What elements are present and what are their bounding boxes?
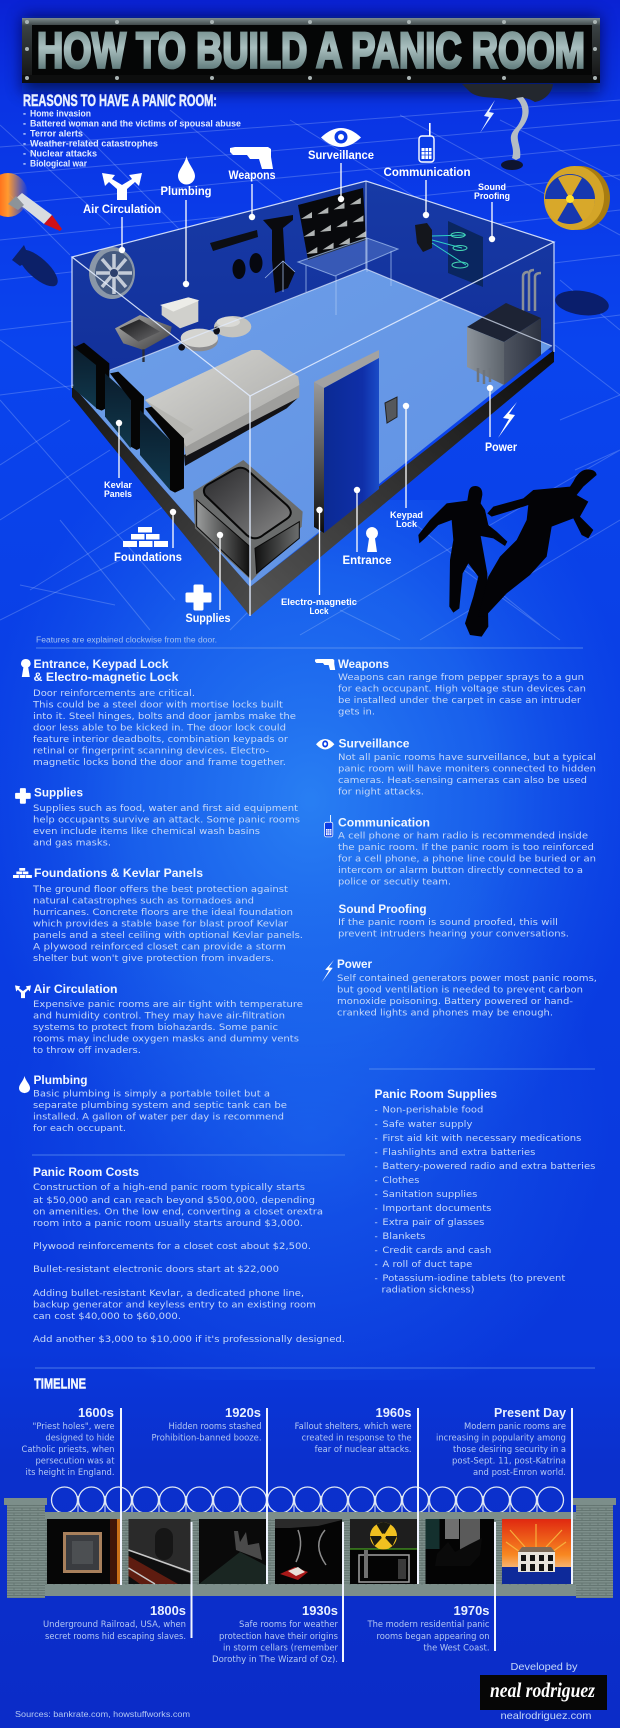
panel: supplies list: - — [374, 1176, 378, 1186]
bed and kevlar panels — [73, 343, 303, 581]
panel: supplies list: Panic Room Supplies — [374, 1089, 497, 1101]
panel: supplies list: - — [374, 1260, 378, 1270]
section: power — [322, 959, 597, 1018]
room illustration — [72, 181, 554, 616]
section: entrance: retinal or fingerprint scanning devices. Electro- — [33, 746, 269, 756]
section: plumbing — [19, 1075, 288, 1134]
label: entrance: Entrance — [342, 555, 392, 567]
section: foundations — [13, 868, 303, 964]
section: power: Power — [337, 959, 373, 971]
reasons list: - — [23, 148, 26, 158]
section: air circulation: systems to protect from biohazards. Some panic — [33, 1023, 278, 1033]
section: power: cranked lights and phones may be enough. — [337, 1008, 553, 1018]
grenades — [232, 253, 262, 279]
section: surveillance: cameras. Heat-sensing cameras can also be used — [338, 776, 587, 786]
section: communication: for a cell phone, a phone line could be buried or an — [338, 854, 596, 864]
label: electro-magnetic lock: Lock — [310, 606, 329, 617]
section: weapons: Weapons — [338, 659, 389, 671]
section: costs: can cost $40,000 to $60,000. — [33, 1312, 181, 1322]
section: power: Self contained generators power most panic rooms, — [337, 974, 597, 984]
panel: supplies list: - — [374, 1120, 378, 1130]
section: supplies: help occupants survive an attack. Some panic rooms — [33, 816, 300, 826]
section: entrance: feature interior deadbolts, combination keypads or — [33, 735, 288, 745]
panel: supplies list: Flashlights and extra batteries — [382, 1148, 536, 1158]
section: communication: the panic room. If the panic room is too reinforced — [338, 843, 594, 853]
section: entrance — [21, 659, 297, 768]
timeline: 1800s: Underground Railroad, USA, when — [43, 1620, 186, 1630]
timeline: 1600s: persecution was at — [36, 1456, 115, 1466]
timeline: present day: and post-Enron world. — [473, 1468, 566, 1478]
panel: supplies list: - — [374, 1232, 378, 1242]
glass wireframe — [72, 181, 554, 616]
timeline: 1970s: the West Coast. — [424, 1644, 490, 1654]
credit: developer logo — [480, 1662, 607, 1722]
section: surveillance — [316, 738, 596, 798]
panel: supplies list: - — [374, 1218, 378, 1228]
label: power — [485, 385, 517, 454]
panel: supplies list: Extra pair of glasses — [382, 1218, 485, 1228]
section: costs: room into a panic room usually starts around $3,000. — [33, 1219, 303, 1229]
footnote: Features are explained clockwise from the door. — [36, 636, 217, 644]
section: entrance: into it. Steel hinges, bolts and door jambs make the — [33, 712, 297, 722]
icon: bomb — [12, 244, 63, 292]
silhouette: right figure — [478, 469, 597, 617]
label: surveillance: Surveillance — [308, 150, 374, 162]
section: air circulation: Expensive panic rooms are air tight with temperature — [33, 1000, 304, 1010]
label: electro-magnetic lock — [281, 507, 357, 617]
intercom — [415, 223, 432, 252]
timeline: 1920s: Hidden rooms stashed — [168, 1422, 262, 1432]
label: sound proofing: Proofing — [474, 191, 510, 202]
icon: tornado and lightning — [462, 84, 553, 170]
section: costs: Bullet-resistant electronic doors start at $22,000 — [33, 1265, 279, 1275]
icon: shadow — [554, 287, 610, 319]
timeline: 1930s: Dorothy in The Wizard of Oz). — [212, 1655, 338, 1665]
section: communication: A cell phone or ham radio is recommended inside — [338, 832, 589, 842]
panel: supplies list: - — [374, 1134, 378, 1144]
timeline: present day: increasing in popularity among — [436, 1434, 566, 1444]
panel: supplies list: Credit cards and cash — [382, 1246, 491, 1256]
section: supplies: Supplies such as food, water and first aid equipment — [33, 804, 299, 814]
section: weapons: be installed under the carpet in case an intruder — [338, 696, 581, 706]
section: supplies — [16, 788, 300, 848]
picture: present day house — [502, 1519, 571, 1584]
section: foundations: Foundations & Kevlar Panels — [34, 868, 203, 880]
silhouettes — [418, 469, 597, 637]
timeline heading: TIMELINE — [34, 1376, 86, 1392]
label: supplies — [186, 532, 230, 625]
room foundation slab — [72, 350, 554, 616]
timeline: 1600s — [22, 1405, 121, 1585]
air vent fan — [89, 247, 135, 299]
section: costs: at $50,000 and can reach beyond $500,000, depending — [33, 1196, 315, 1206]
panel: supplies list: radiation sickness) — [382, 1286, 474, 1296]
section: communication: Communication — [338, 818, 430, 830]
picture: 1960s fallout shelter — [350, 1519, 417, 1584]
section: entrance: door less able to be kicked in. The door lock could — [33, 724, 286, 734]
label: supplies: Supplies — [186, 613, 230, 625]
section: entrance: Door reinforcements are critical. — [33, 689, 195, 699]
label: weapons — [228, 147, 276, 220]
section: weapons: gets in. — [338, 708, 375, 718]
section: foundations: hurricanes. Concrete floors are the ideal foundation — [33, 908, 293, 918]
label: electro-magnetic lock: Electro-magnetic — [281, 597, 357, 608]
section: costs: Construction of a high-end panic room typically starts — [33, 1183, 305, 1193]
picture: 1920s hidden room — [199, 1519, 267, 1584]
reasons list: Biological war — [30, 158, 87, 168]
label: communication — [384, 123, 470, 218]
section: surveillance: for night attacks. — [338, 788, 424, 798]
label: kevlar panels — [104, 420, 132, 500]
reasons list: - — [23, 118, 26, 128]
label: air circulation — [83, 173, 161, 253]
section: costs: Panic Room Costs — [33, 1167, 139, 1179]
section: costs: Plywood reinforcements for a closet cost about $2,500. — [33, 1242, 311, 1252]
section: costs: backup generator and keyless entry to an existing room — [33, 1300, 316, 1310]
timeline: 1960s — [295, 1405, 418, 1584]
timeline: 1970s: rooms began appearing on — [376, 1632, 490, 1642]
section: power: but good ventilation is needed to prevent carbon — [337, 986, 583, 996]
timeline: present day: Modern panic rooms are — [464, 1422, 566, 1432]
icon: missile — [0, 173, 62, 231]
bidet — [213, 316, 251, 337]
timeline: 1960s: Fallout shelters, which were — [295, 1422, 412, 1432]
monitor wall — [298, 188, 366, 260]
label: kevlar panels: Kevlar — [104, 480, 132, 491]
section: weapons: Weapons can range from pepper sprays to a gun — [338, 673, 584, 683]
silhouette: left figure — [418, 486, 507, 637]
section: foundations: natural catastrophes such as tornadoes and — [33, 896, 254, 906]
section: surveillance: Not all panic rooms have surveillance, but a typical — [338, 753, 596, 763]
section: plumbing: separate plumbing system and septic tank can be — [33, 1101, 288, 1111]
icon: radiation drum — [540, 162, 610, 234]
section: entrance: magnetic locks bond the door and frame together. — [33, 758, 286, 768]
panel: supplies list: - — [374, 1246, 378, 1256]
panel: supplies list: Sanitation supplies — [382, 1190, 478, 1200]
reasons list: REASONS TO HAVE A PANIC ROOM: — [23, 92, 217, 110]
section: entrance: Entrance, Keypad Lock — [34, 659, 169, 671]
credit: developer logo: Developed by — [510, 1662, 578, 1673]
plumbing fixtures — [115, 297, 251, 362]
label: air circulation: Air Circulation — [83, 204, 161, 216]
kevlar panel 1 — [73, 343, 109, 411]
timeline: 1960s: created in response to the — [302, 1434, 412, 1444]
sources: Sources: bankrate.com, howstuffworks.com — [15, 1709, 190, 1719]
timeline: 1970s: 1970s — [454, 1603, 490, 1618]
section: costs: Add another $3,000 to $10,000 if it's professionally designed. — [33, 1335, 345, 1345]
section: foundations: which provides a stable base for blast proof Kevlar — [33, 920, 288, 930]
timeline: 1930s: protection have their origins — [219, 1632, 339, 1642]
label: keypad lock — [390, 403, 423, 530]
bed — [145, 350, 299, 466]
section: plumbing: installed. A gallon of water per day is recommend — [33, 1112, 284, 1122]
panel: supplies list: Potassium-iodine tablets (to prevent — [382, 1274, 566, 1284]
credit: developer logo: nealrodriguez.com — [500, 1710, 592, 1722]
section: sound proofing: Sound Proofing — [338, 904, 426, 916]
section: surveillance: Surveillance — [338, 738, 410, 750]
panel: supplies list: Non-perishable food — [382, 1106, 483, 1116]
timeline: 1600s: its height in England. — [26, 1468, 114, 1478]
timeline: 1960s: 1960s — [376, 1405, 412, 1420]
label: foundations — [114, 509, 182, 564]
label: communication: Communication — [384, 167, 470, 179]
panel: supplies list: - — [374, 1204, 378, 1214]
picture: 1930s storm cellar — [275, 1519, 342, 1584]
label: surveillance — [308, 128, 374, 202]
label: kevlar panels: Panels — [104, 489, 132, 500]
section: plumbing: for each occupant. — [33, 1124, 126, 1134]
timeline: 1800s: 1800s — [150, 1603, 186, 1618]
timeline: 1920s — [152, 1405, 267, 1584]
reasons list: Nuclear attacks — [30, 148, 97, 158]
desk — [298, 238, 398, 315]
panel: supplies list: - — [374, 1190, 378, 1200]
generator — [467, 270, 541, 385]
section: sound proofing — [338, 904, 569, 940]
timeline: present day: Present Day — [494, 1405, 567, 1420]
section: foundations: panels and a steel ceiling with optional Kevlar panels. — [33, 931, 303, 941]
label: power: Power — [485, 442, 517, 454]
section: sound proofing: If the panic room is sound proofed, this will — [338, 918, 558, 928]
rocket launcher — [210, 230, 258, 251]
timeline: 1800s: secret rooms hid escaping slaves. — [45, 1632, 186, 1642]
room walls — [72, 181, 554, 388]
section: supplies: and gas masks. — [33, 838, 111, 848]
timeline: 1930s: in storm cellars (remember — [223, 1644, 338, 1654]
section: entrance: & Electro-magnetic Lock — [34, 672, 179, 684]
toilet — [160, 297, 218, 351]
door — [314, 350, 379, 533]
section: entrance: This could be a steel door with mortise locks built — [32, 700, 284, 710]
label: sound proofing: Sound — [478, 182, 506, 193]
reasons list: - — [23, 158, 26, 168]
panel: supplies list: Clothes — [382, 1176, 420, 1186]
panel: supplies list: A roll of duct tape — [382, 1260, 473, 1270]
label: plumbing: Plumbing — [160, 186, 212, 198]
timeline: 1600s: Catholic priests, when — [22, 1445, 114, 1455]
reasons list — [23, 92, 241, 168]
sound proof panel — [432, 221, 483, 287]
panel: supplies list: - — [374, 1162, 378, 1172]
section: sound proofing: prevent intruders hearing your conversations. — [338, 930, 569, 940]
title banner — [22, 16, 600, 92]
panel: supplies list: First aid kit with necessary medications — [382, 1134, 582, 1144]
timeline: 1970s — [367, 1522, 495, 1654]
panel: supplies list: - — [374, 1274, 378, 1284]
label: weapons: Weapons — [228, 170, 276, 182]
reasons list: Battered woman and the victims of spousal abuse — [30, 118, 241, 128]
timeline: 1920s: 1920s — [225, 1405, 261, 1420]
label: keypad lock: Keypad — [390, 510, 423, 521]
panel: supplies list: Safe water supply — [382, 1120, 473, 1130]
section: costs: on amenities. On the low end, converting a closet orextra — [33, 1208, 323, 1218]
section: foundations: shelter but won't give protection from invaders. — [33, 954, 274, 964]
panel: supplies list — [374, 1089, 596, 1296]
reasons list: Home invasion — [30, 108, 91, 118]
timeline: present day: those desiring security in a — [453, 1445, 566, 1455]
section: weapons: for each occupant. High voltage stun devices can — [338, 684, 586, 694]
section: supplies: even include items like chemical wash basins — [33, 827, 260, 837]
reasons list: - — [23, 128, 26, 138]
kevlar panel 3 — [140, 407, 184, 493]
timeline: 1930s — [212, 1522, 343, 1665]
section: air circulation: rooms may include oxygen masks and dummy vents — [33, 1034, 299, 1044]
supply box — [193, 460, 303, 581]
section: costs: Adding bullet-resistant Kevlar, a dedicated phone line, — [33, 1289, 304, 1299]
panel: supplies list: Important documents — [382, 1204, 492, 1214]
panel: supplies list: Battery-powered radio and extra batteries — [382, 1162, 596, 1172]
label: plumbing — [160, 156, 212, 287]
section: power: monoxide poisoning. Battery powered or hand- — [337, 997, 573, 1007]
section: communication: police or secutiy team. — [338, 878, 451, 888]
panel: supplies list: - — [374, 1106, 378, 1116]
timeline: 1920s: Prohibition-banned booze. — [152, 1434, 262, 1444]
barbed wire — [52, 1487, 564, 1513]
timeline: 1970s: The modern residential panic — [367, 1620, 490, 1630]
label: sound proofing — [474, 182, 510, 242]
wall structure — [4, 1498, 616, 1598]
label: entrance — [342, 487, 392, 567]
reasons list: - — [23, 138, 26, 148]
timeline: 1930s: Safe rooms for weather — [239, 1620, 338, 1630]
section: air circulation — [15, 984, 304, 1056]
reasons list: Terror alerts — [30, 128, 83, 138]
section: foundations: The ground floor offers the best protection against — [32, 885, 289, 895]
section: supplies: Supplies — [34, 788, 83, 800]
section: air circulation: to throw off invaders. — [33, 1046, 141, 1056]
credit: developer logo: neal rodriguez — [490, 1678, 596, 1702]
section: communication — [325, 815, 596, 888]
section: weapons — [315, 659, 586, 718]
section: air circulation: and humidity control. They may have air-filtration — [33, 1012, 285, 1022]
keypad — [385, 397, 397, 423]
section: communication: intercom or alarm button directly connected to a — [338, 866, 583, 876]
kevlar panel 2 — [105, 372, 144, 450]
picture: 1970s silhouettes — [426, 1519, 494, 1584]
timeline: 1930s: 1930s — [302, 1603, 338, 1618]
label: foundations: Foundations — [114, 552, 182, 564]
picture: 1800s railroad — [128, 1519, 190, 1584]
sink — [115, 315, 172, 362]
timeline: present day — [436, 1405, 572, 1584]
timeline: 1800s — [43, 1522, 192, 1642]
timeline: 1600s: "Priest holes", were — [32, 1422, 114, 1432]
reasons list: Weather-related catastrophes — [30, 138, 158, 148]
timeline: 1960s: fear of nuclear attacks. — [315, 1445, 412, 1455]
reasons list: - — [23, 108, 26, 118]
timeline: 1600s: 1600s — [78, 1405, 114, 1420]
panel: supplies list: - — [374, 1148, 378, 1158]
panel: supplies list: Blankets — [382, 1232, 426, 1242]
picture: 1600s priest hole — [47, 1519, 120, 1584]
section: foundations: A plywood reinforced closet can provide a storm — [33, 942, 286, 952]
timeline: present day: post-Sept. 11, post-Katrina — [452, 1456, 566, 1466]
section: plumbing: Plumbing — [34, 1075, 88, 1087]
label: keypad lock: Lock — [396, 519, 418, 530]
section: costs — [33, 1167, 345, 1345]
section: plumbing: Basic plumbing is simply a portable toilet but a — [33, 1090, 270, 1100]
timeline: 1600s: designed to hide — [46, 1434, 114, 1444]
weapon rack — [263, 215, 295, 293]
section: surveillance: panic room will have moniters connected to hidden — [338, 764, 596, 774]
room floor — [72, 269, 552, 587]
section: air circulation: Air Circulation — [34, 984, 118, 996]
